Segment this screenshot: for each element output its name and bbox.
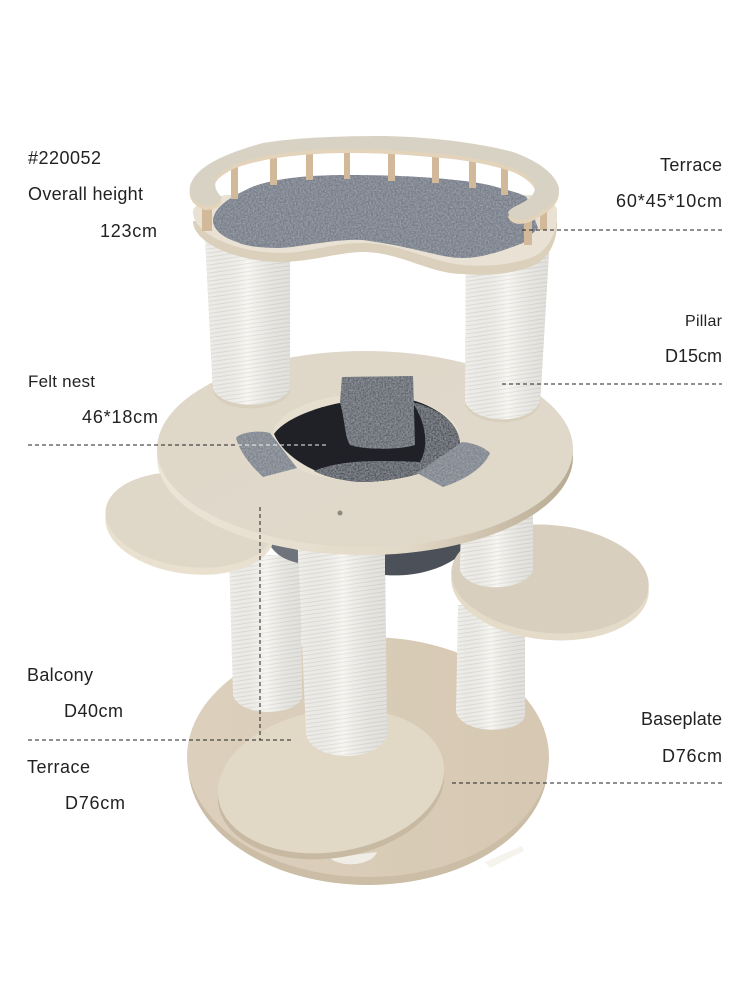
label: felt nest bbox=[28, 372, 158, 427]
baseplate bbox=[187, 637, 549, 885]
left felt flap bbox=[236, 432, 297, 477]
felt nest underside bbox=[268, 540, 472, 575]
label: terrace size: 60*45*10cm bbox=[616, 191, 722, 211]
nest opening bbox=[272, 394, 460, 482]
left balcony bbox=[100, 463, 280, 584]
label line: felt nest black part bbox=[28, 444, 238, 446]
label: baseplate: D76cm bbox=[662, 746, 722, 766]
label: balcony: D40cm bbox=[64, 701, 123, 721]
terrace platform edge bbox=[193, 221, 557, 275]
right felt flap bbox=[417, 442, 490, 487]
label line: baseplate bbox=[452, 782, 722, 784]
label: terrace lower bbox=[27, 757, 125, 813]
label: balcony bbox=[27, 665, 123, 721]
top kidney terrace bbox=[190, 136, 559, 275]
platform screw hole bbox=[338, 510, 342, 516]
balusters bbox=[202, 149, 547, 245]
upper right pillar bbox=[465, 235, 550, 422]
label: pillar: Pillar bbox=[685, 313, 723, 330]
label: product number and height: Overall height bbox=[28, 184, 143, 204]
label: product number and height: 123cm bbox=[100, 221, 157, 241]
central round platform bbox=[157, 351, 573, 555]
label line: terrace bbox=[522, 229, 722, 231]
curved guard rail bevel bbox=[190, 140, 559, 224]
nest interior bbox=[274, 400, 460, 482]
right rear pillar upper bbox=[460, 495, 533, 587]
label: terrace lower: D76cm bbox=[65, 793, 125, 813]
label: product number and height bbox=[28, 148, 157, 241]
label: terrace size bbox=[616, 155, 722, 211]
label: felt nest: 46*18cm bbox=[82, 407, 158, 427]
right balcony bbox=[447, 517, 653, 648]
label line: balcony vertical bbox=[259, 507, 261, 740]
terrace small round platform bbox=[207, 693, 455, 875]
label: pillar bbox=[665, 313, 723, 366]
label: felt nest: Felt nest bbox=[28, 372, 95, 391]
label line: felt nest white part bbox=[238, 444, 328, 446]
label: terrace size: Terrace bbox=[660, 155, 722, 175]
label: product number and height: #220052 bbox=[28, 148, 101, 168]
label line: pillar bbox=[502, 383, 722, 385]
right rear pillar lower bbox=[456, 605, 525, 730]
upper left pillar bbox=[205, 235, 290, 408]
felt nest bbox=[236, 376, 490, 487]
label: pillar: D15cm bbox=[665, 346, 722, 366]
label: baseplate bbox=[641, 709, 722, 766]
front pillar bbox=[298, 545, 387, 756]
label: balcony: Balcony bbox=[27, 665, 93, 685]
terrace platform top bbox=[193, 195, 557, 266]
left rear pillar bbox=[229, 555, 302, 712]
grey felt mat bbox=[213, 175, 538, 258]
nest inner felt bbox=[314, 402, 460, 482]
label line: balcony and terrace bbox=[28, 739, 292, 741]
terrace post stub bbox=[330, 852, 377, 864]
back felt flap bbox=[340, 376, 415, 449]
label: baseplate: Baseplate bbox=[641, 709, 722, 729]
label: terrace lower: Terrace bbox=[27, 757, 90, 777]
curved guard rail bbox=[190, 136, 559, 220]
